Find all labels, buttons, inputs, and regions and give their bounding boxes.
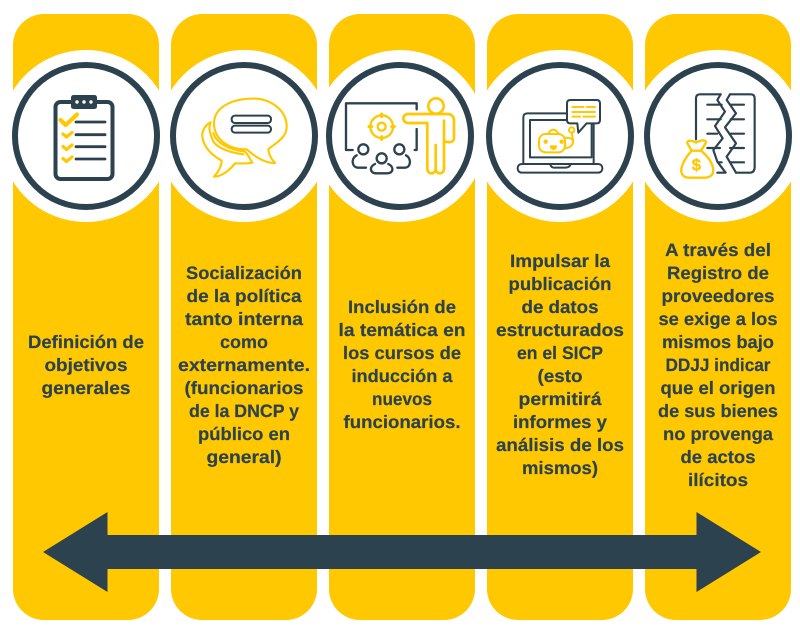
icon: clipboard checklist: [56, 95, 112, 179]
text: impulsar la publicación: de datos: [522, 297, 598, 317]
panel: inclusión: [329, 14, 475, 620]
text: impulsar la publicación: informes y: [513, 412, 607, 432]
text: definición de objetivos: generales: [42, 378, 130, 398]
text: registro de proveedores: DDJJ indicar: [666, 355, 770, 375]
icon: torn document with money bag: $: [692, 155, 701, 174]
panel: objetivos: [13, 14, 159, 620]
text: registro de proveedores: se exige a los: [658, 309, 778, 329]
text: impulsar la publicación: mismos): [522, 458, 598, 478]
text: socialización de la política: público en: [198, 424, 290, 444]
text: definición de objetivos: objetivos: [44, 355, 128, 375]
text: inclusión de la temática: [338, 297, 466, 432]
icon: laptop with chatbot: [518, 100, 602, 173]
text: registro de proveedores: no provenga: [663, 424, 774, 444]
text: registro de proveedores: que el origen: [660, 378, 776, 398]
text: registro de proveedores: mismos bajo: [662, 332, 774, 352]
text: impulsar la publicación: análisis de los: [496, 435, 624, 455]
text: socialización de la política: general): [206, 447, 282, 467]
text: impulsar la publicación: (esto: [538, 366, 582, 386]
text: inclusión de la temática: los cursos de: [343, 343, 461, 363]
icon: speech bubbles: [202, 99, 287, 177]
text: registro de proveedores: proveedores: [662, 286, 774, 306]
text: registro de proveedores: A través del: [665, 240, 771, 260]
text: socialización de la política: (funcionarios: [184, 378, 304, 398]
text: registro de proveedores: de sus bienes: [658, 401, 778, 421]
icon: torn document with money bag: [681, 94, 755, 178]
text: registro de proveedores: de actos: [680, 447, 756, 467]
panel: socialización: [171, 14, 317, 620]
text: impulsar la publicación: en el SICP: [517, 343, 603, 363]
arrow: double-headed timeline: [43, 512, 761, 592]
panel: publicación de datos: [487, 14, 633, 620]
text: socialización de la política: como: [220, 332, 268, 352]
text: registro de proveedores: Registro de: [667, 263, 769, 283]
text: impulsar la publicación: publicación: [508, 274, 612, 294]
text: registro de proveedores: [658, 240, 778, 490]
text: socialización de la política: de la DNCP y: [189, 401, 299, 421]
text: impulsar la publicación: permitirá: [518, 389, 603, 409]
icon: presenter with audience: [346, 98, 454, 173]
text: inclusión de la temática: nuevos: [372, 389, 432, 409]
text: socialización de la política: Socialización: [186, 263, 302, 283]
text: socialización de la política: tanto interna: [185, 309, 304, 329]
text: definición de objetivos: [28, 332, 144, 398]
text: inclusión de la temática: Inclusión de: [348, 297, 456, 317]
text: impulsar la publicación: Impulsar la: [510, 251, 611, 271]
text: definición de objetivos: Definición de: [28, 332, 144, 352]
text: impulsar la publicación: [496, 251, 624, 478]
text: socialización de la política: externamente.: [178, 355, 310, 375]
text: socialización de la política: [178, 263, 310, 467]
text: inclusión de la temática: la temática en: [338, 320, 466, 340]
panel: registro de proveedores: [645, 14, 791, 620]
text: inclusión de la temática: funcionarios.: [344, 412, 460, 432]
text: inclusión de la temática: inducción a: [352, 366, 453, 386]
text: socialización de la política: de la política: [186, 286, 303, 306]
text: registro de proveedores: ilícitos: [688, 470, 748, 490]
text: impulsar la publicación: estructurados: [496, 320, 624, 340]
